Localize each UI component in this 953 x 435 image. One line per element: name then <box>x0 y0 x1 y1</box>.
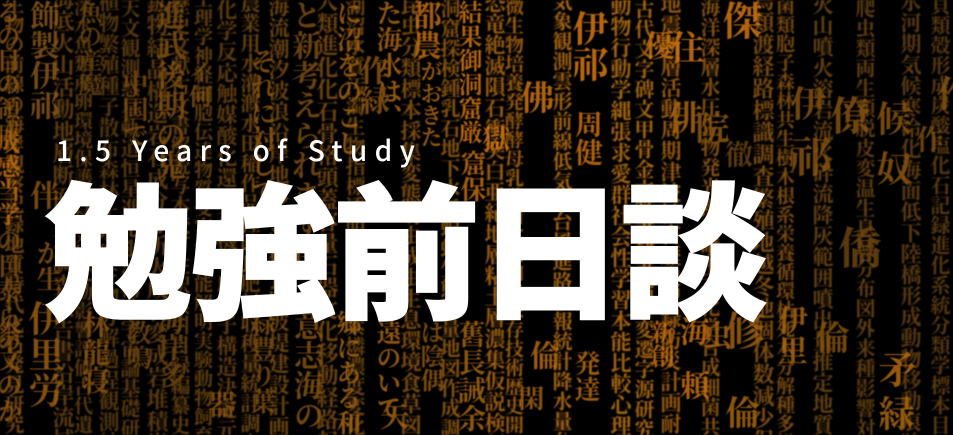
title: 勉強前日談 <box>45 137 765 350</box>
background: columns of orange kanji on black: 僚 <box>822 95 879 135</box>
background: columns of orange kanji on black: 倫 <box>808 320 857 354</box>
background: columns of orange kanji on black: 伊 <box>783 85 834 121</box>
background: columns of orange kanji on black: 俳 <box>661 100 710 134</box>
background: columns of orange kanji on black: 修 <box>717 310 774 350</box>
background: columns of orange kanji on black: 矛 <box>870 350 925 388</box>
background: columns of orange kanji on black: か生 <box>31 240 68 292</box>
background: columns of orange kanji on black: 住 <box>663 30 712 64</box>
background: columns of orange kanji on black: 候 <box>869 100 920 136</box>
background: columns of orange kanji on black: 飾製伊祁 <box>23 0 67 120</box>
background: columns of orange kanji on black: 進武後期の鬼 <box>149 0 193 180</box>
background: columns of orange kanji on black: 海 <box>673 316 717 346</box>
background: columns of orange kanji on black: 郷にある和 <box>331 310 367 435</box>
background: columns of orange kanji on black: に沼をのこし <box>331 0 368 156</box>
background: columns of orange kanji on black: 林龍寝 <box>76 310 116 394</box>
background: columns of orange kanji on black: がおきた <box>416 60 447 148</box>
background: columns of orange kanji on black: 徹 <box>719 140 759 168</box>
background: columns of orange kanji on black: 伊里 <box>771 305 815 365</box>
background: columns of orange kanji on black: 作緑 <box>353 55 397 115</box>
background: columns of orange kanji on black: 器 <box>202 390 242 418</box>
background: columns of orange kanji on black: 緑豊り葉 <box>245 310 282 414</box>
background: columns of orange kanji on black: イ何 <box>183 60 218 108</box>
background: columns of orange kanji on black: 獄 <box>476 125 516 153</box>
background: columns of orange kanji on black: 伴 <box>23 180 67 210</box>
background: columns of orange kanji on black: 伊里労 <box>21 300 72 408</box>
background: columns of orange kanji on black: 僑 <box>828 225 892 269</box>
background: columns of orange kanji on black: 倫 <box>523 340 567 370</box>
background: columns of orange kanji on black: それに対して <box>245 48 282 204</box>
background: columns of orange kanji on black: 閑 <box>513 385 550 411</box>
background: columns of orange kanji on black: 意志海の <box>287 310 331 430</box>
background: columns of orange kanji on black: 頼 <box>673 370 717 400</box>
background: columns of orange kanji on black: 傑 <box>714 0 771 40</box>
background: columns of orange kanji on black: 院 <box>688 110 737 144</box>
background: columns of orange kanji on black: 舊長誡余 <box>452 320 492 432</box>
background: columns of orange kanji on black: 教鳴 <box>121 320 157 370</box>
background: columns of orange kanji on black: 魚の産魔 <box>73 0 108 96</box>
background: columns of orange kanji on black: は陰偶 <box>415 320 450 392</box>
background: columns of orange kanji on black: 倫 <box>718 395 767 429</box>
subtitle: 1.5 Years of Study <box>56 130 422 170</box>
background: columns of orange kanji on black: た海水は、 <box>371 0 408 130</box>
background: columns of orange kanji on black: と新考えられます保 <box>285 0 329 270</box>
background: columns of orange kanji on black: 窟保 <box>455 150 492 202</box>
background: columns of orange kanji on black: 結果御洞窟厳 <box>453 0 488 144</box>
background: columns of orange kanji on black: 発達 <box>569 350 606 402</box>
background: columns of orange kanji on black: 遠のいて <box>371 320 407 420</box>
background: columns of orange kanji on black: 祁 <box>781 135 841 177</box>
background: columns of orange kanji on black: 奴 <box>869 150 920 186</box>
background: columns of orange kanji on black: 優 <box>638 30 682 60</box>
background: columns of orange kanji on black: 都農 <box>405 0 449 60</box>
background: columns of orange kanji on black: 新創 <box>645 320 680 368</box>
background: columns of orange kanji on black: 佛 <box>513 80 562 114</box>
background: columns of orange kanji on black: 中国で <box>117 70 154 148</box>
background: columns of orange kanji on black: 虫 <box>695 320 739 350</box>
background: columns of orange kanji on black: 伊祁 <box>565 10 616 82</box>
background: columns of orange kanji on black: 緑 <box>871 395 922 431</box>
background: columns of orange kanji on black: 海岸多 <box>152 305 192 389</box>
background: columns of orange kanji on black: 周健 <box>569 110 609 166</box>
background: columns of orange kanji on black: 矢 <box>373 400 417 430</box>
background: columns of orange kanji on black: 作 <box>910 125 950 153</box>
